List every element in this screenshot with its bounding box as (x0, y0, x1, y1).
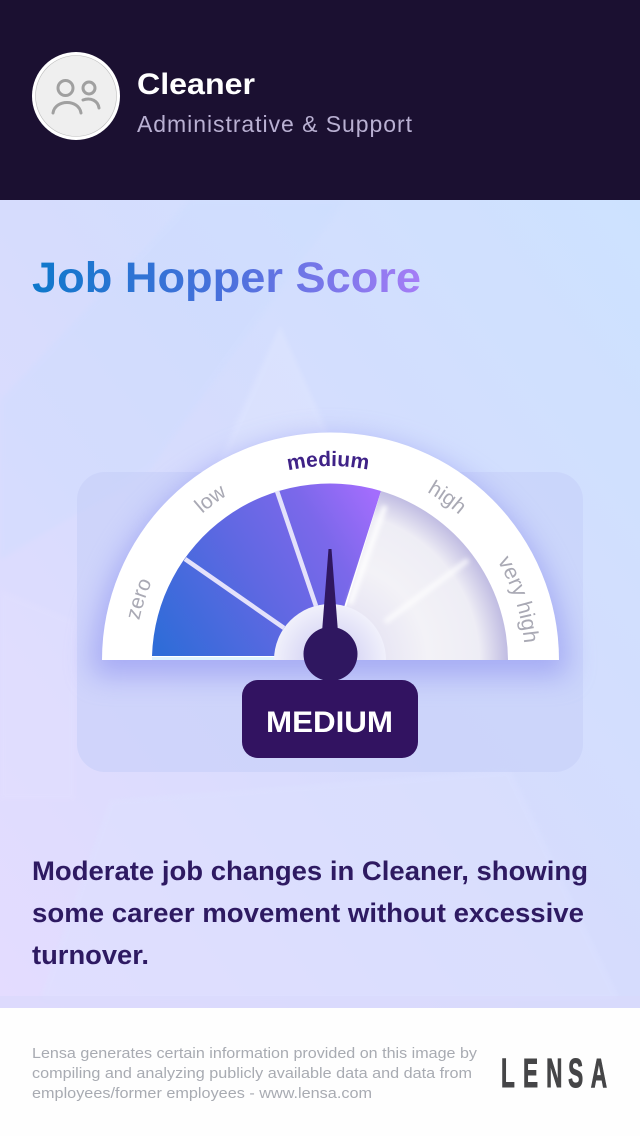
gauge white rim (102, 432, 559, 660)
gauge hub (274, 604, 386, 660)
sector: zero and low and medium (152, 484, 381, 656)
description text: some career movement without excessive (32, 898, 584, 928)
background panel (0, 200, 640, 1010)
sector: high and very high (330, 491, 508, 660)
score badge (242, 680, 418, 758)
LENSA logo: LENSA (501, 1051, 607, 1097)
zero label: zero (128, 580, 150, 620)
footer (0, 1008, 640, 1136)
description text: turnover. (32, 940, 149, 970)
disclaimer text: employees/former employees - www.lensa.com (32, 1085, 372, 1102)
job category: Administrative & Support (137, 111, 413, 137)
disclaimer text: compiling and analyzing publicly available data and data from (32, 1065, 472, 1082)
avatar icon (32, 52, 120, 140)
score badge: MEDIUM (266, 706, 393, 739)
disclaimer text: Lensa generates certain information provided on this image by (32, 1045, 478, 1062)
gauge chart (82, 425, 578, 688)
header band (0, 0, 640, 200)
high label: high (428, 480, 464, 514)
needle (304, 549, 358, 681)
job title: Cleaner (137, 68, 255, 101)
description text (32, 856, 588, 970)
very high label: very high (500, 556, 539, 642)
low label: low (193, 486, 225, 513)
medium label: medium (288, 450, 368, 470)
heading: Job Hopper Score (32, 254, 421, 302)
disclaimer text (32, 1045, 478, 1102)
description text: Moderate job changes in Cleaner, showing (32, 856, 588, 886)
gauge card (77, 472, 583, 772)
